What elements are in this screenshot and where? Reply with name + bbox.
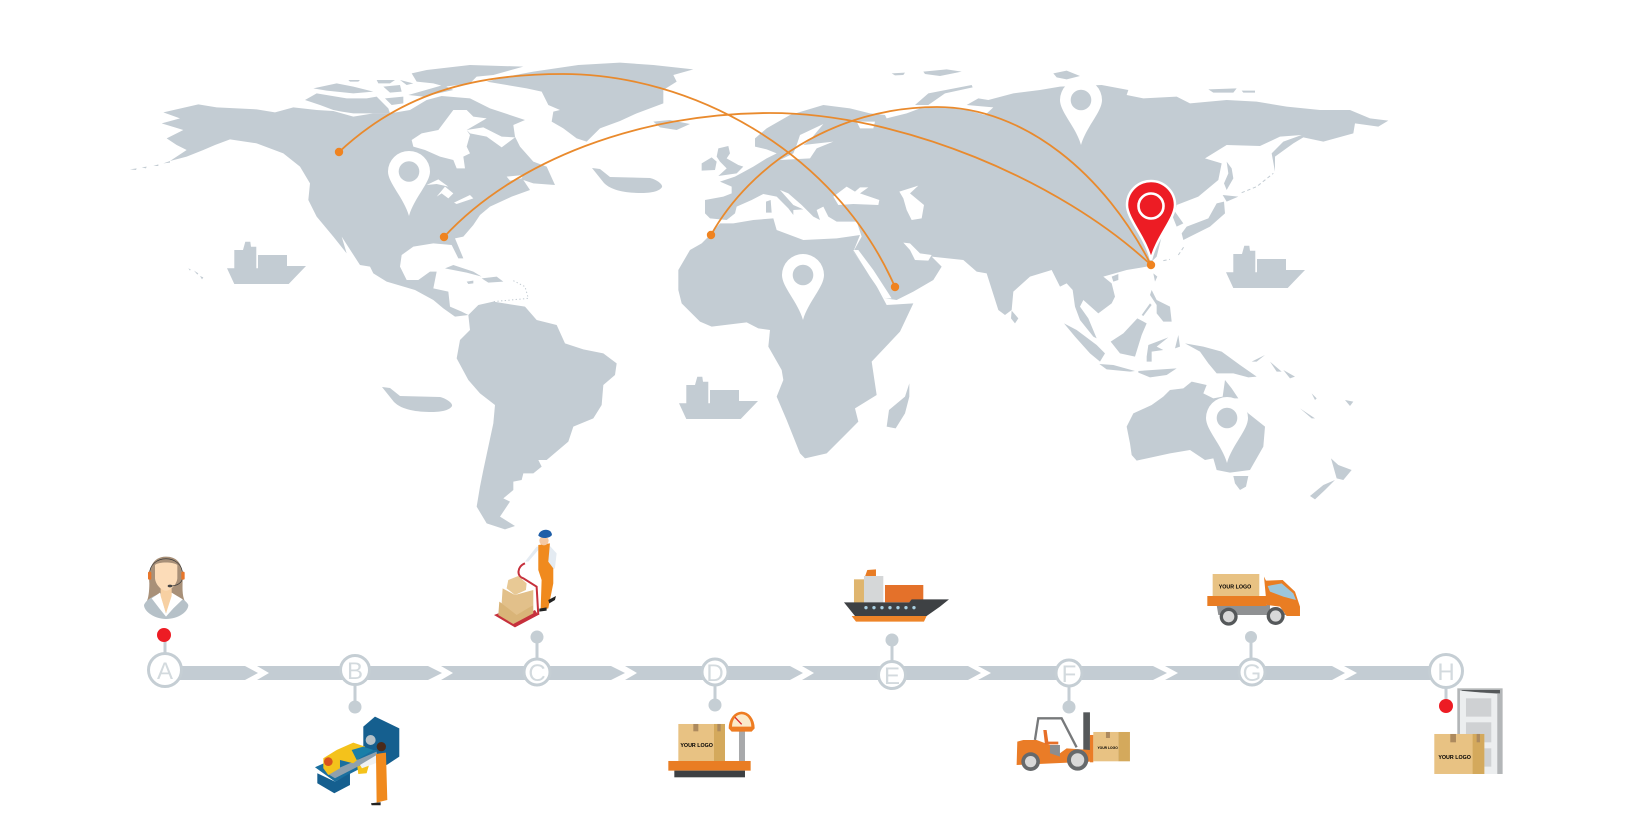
dot: morocco [707,231,715,239]
icon: forklift carrying box [1017,712,1130,771]
step D marker [702,659,728,712]
icon: package on weighing scale: YOUR LOGO [680,743,713,749]
step G marker: G [1243,660,1261,687]
step G marker [1239,631,1265,687]
step A marker: A [157,658,173,685]
dot: usa [440,233,448,241]
dot: canada [335,148,343,156]
icon: package at open door [1434,688,1503,774]
route arcs [339,74,1151,287]
arc: usa to china [444,113,1151,265]
icon: ship south atlantic [679,377,758,419]
map pin: australia [1206,397,1248,463]
icon: ship north pacific [227,242,306,284]
map pin: red origin in china [1127,181,1175,260]
icon: lathe machine and operator [315,717,399,805]
step B marker [340,656,370,714]
icon: container ship [844,569,949,622]
timeline [148,628,1462,714]
europe, asia and africa [653,69,1388,458]
route endpoints [335,148,1155,291]
step H marker: H [1437,659,1455,686]
timeline chevrons [170,666,1435,680]
southeast asia and oceania [1064,290,1353,499]
step H marker [1430,654,1462,713]
japan and north pacific islands [1112,162,1273,282]
icon: delivery truck: YOUR LOGO [1219,585,1251,591]
south america [457,302,617,529]
map pin: russia [1060,79,1102,145]
step E marker [878,634,906,690]
icon: plane south pacific [382,387,452,412]
step E marker: E [884,663,900,690]
step C marker: C [528,660,546,687]
icon: forklift carrying box: YOUR LOGO [1097,746,1118,750]
icon: package at open door: YOUR LOGO [1438,755,1471,761]
icon: ship west pacific [1226,246,1305,288]
map pin: africa [782,254,824,320]
icon: plane north atlantic [592,168,662,193]
dot: arabia [891,283,899,291]
arc: canada to arabia [339,74,895,287]
map pin: north america [388,151,430,216]
north america, greenland and arctic islands [130,63,693,317]
step C marker [524,630,550,687]
step A marker [148,628,182,686]
step F marker [1056,660,1082,714]
dot: china [1147,261,1155,269]
icon: package on weighing scale [668,712,755,777]
icon: call centre agent with headset [144,557,188,619]
arc: morocco to china [711,107,1151,265]
icon: delivery truck [1207,574,1300,626]
step F marker: F [1062,661,1076,688]
world map [130,63,1388,529]
step B marker: B [347,658,363,685]
icon: worker with hand truck and boxes [494,530,557,627]
step D marker: D [706,660,724,687]
